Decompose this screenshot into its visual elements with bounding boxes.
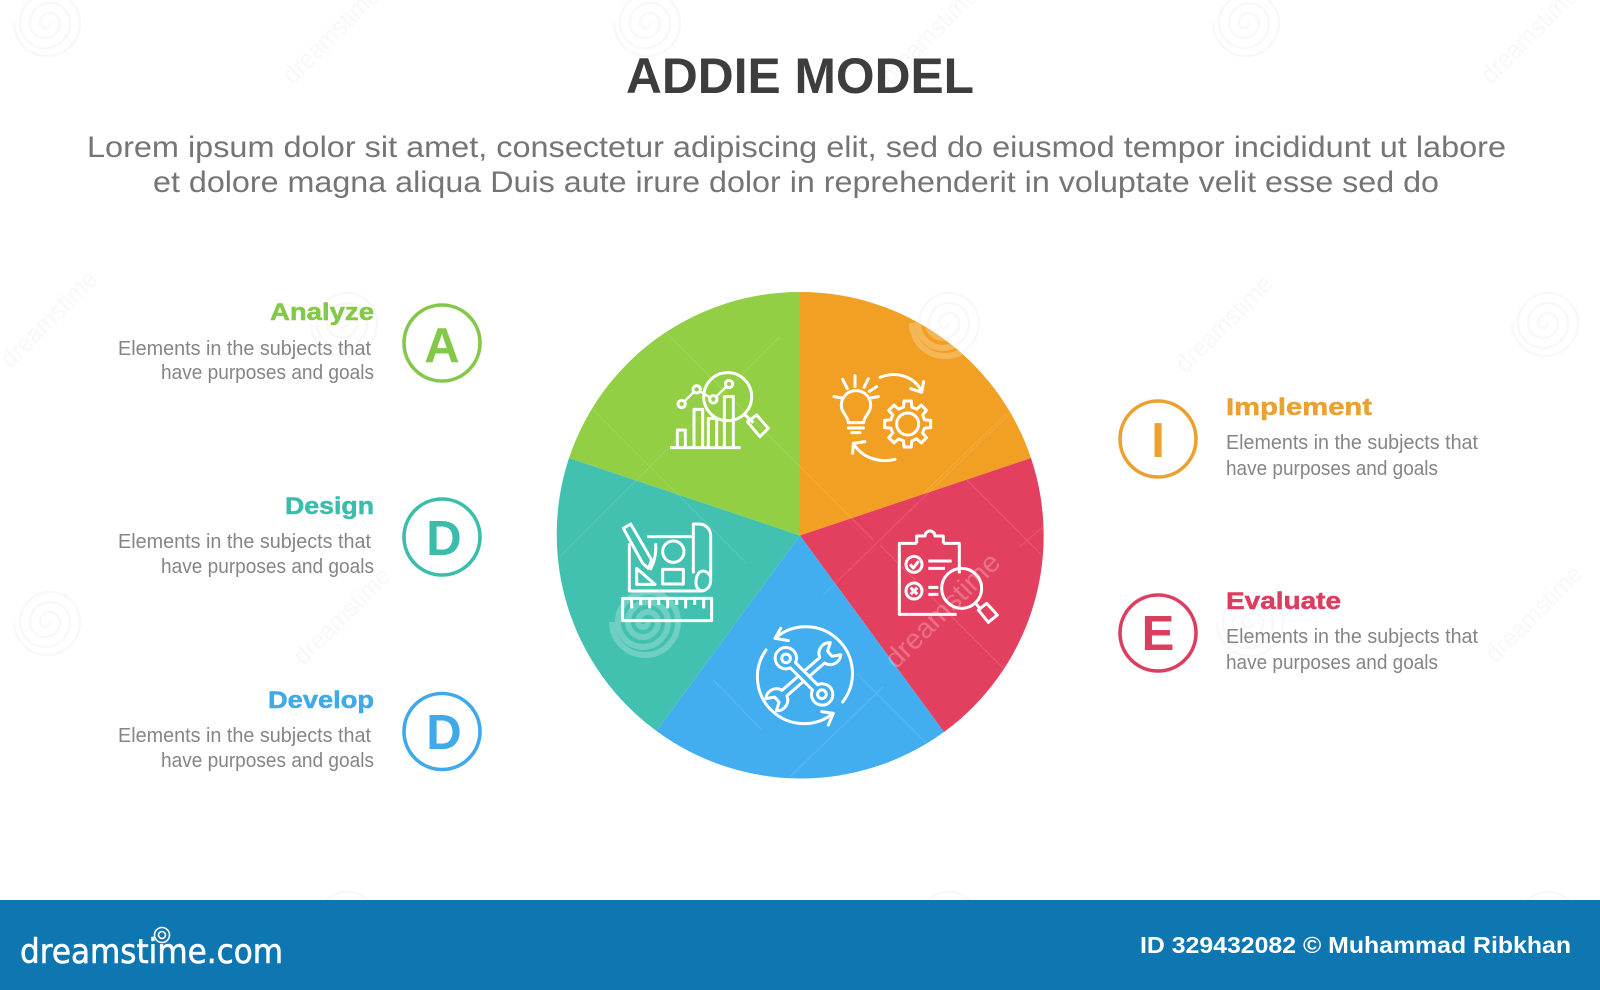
letter circle: A: A (424, 319, 460, 373)
description: analyze: Elements in the subjects that (118, 337, 371, 360)
icon: chart with magnifier (670, 373, 768, 448)
heading: evaluate: Evaluate (1226, 588, 1341, 615)
watermark pattern on background: dreamstime (1169, 269, 1278, 378)
description: implement: have purposes and goals (1226, 457, 1438, 480)
intro text block (87, 131, 1506, 199)
segment: analyze (569, 292, 800, 536)
segment: evaluate (800, 458, 1044, 732)
footer bar (0, 900, 1600, 990)
description: implement (1226, 431, 1478, 480)
description: design: Elements in the subjects that (118, 530, 371, 553)
segment: design (557, 458, 800, 731)
footer logo: dreamstime.com (20, 932, 283, 972)
intro text block: Lorem ipsum dolor sit amet, consectetur adipiscing elit, sed do eiusmod tempor incididunt ut labore (87, 131, 1506, 164)
watermark pattern on background: dreamstime (1479, 559, 1588, 668)
description: analyze (118, 337, 374, 384)
panel: implement (1120, 394, 1478, 480)
icon: clipboard with magnifier (899, 531, 997, 622)
letter circle: A (404, 305, 480, 381)
description: evaluate: Elements in the subjects that (1226, 625, 1478, 648)
description: design: have purposes and goals (161, 555, 374, 578)
icon: wrenches in cycle arrows (757, 627, 852, 725)
icon: blueprint and ruler (623, 524, 712, 621)
pie chart: dreamstime (878, 546, 1006, 674)
letter circle: D: D (426, 512, 462, 566)
description: evaluate (1226, 625, 1478, 674)
description: design (118, 530, 374, 578)
description: develop: have purposes and goals (161, 749, 374, 772)
heading: develop: Develop (268, 687, 374, 714)
panel: evaluate (1120, 588, 1478, 674)
letter circle: E: E (1142, 607, 1174, 661)
heading: design: Design (285, 493, 374, 520)
heading: implement: Implement (1226, 394, 1372, 421)
letter circle: I (1120, 401, 1196, 477)
description: analyze: have purposes and goals (161, 361, 374, 384)
title: ADDIE MODEL (626, 48, 974, 104)
letter circle: D: D (426, 706, 462, 760)
description: develop (118, 724, 374, 772)
segment: implement (800, 292, 1031, 536)
letter circle: I: I (1151, 414, 1165, 468)
watermark pattern on background: dreamstime (287, 561, 396, 670)
segment: develop (656, 536, 944, 778)
panel: develop (118, 687, 480, 772)
icon: bulb, gear and cycle arrows (834, 375, 931, 461)
description: develop: Elements in the subjects that (118, 724, 371, 747)
pie chart: dreamstime (571, 269, 680, 378)
description: implement: Elements in the subjects that (1226, 431, 1478, 454)
heading: analyze: Analyze (270, 299, 374, 326)
intro text block: et dolore magna aliqua Duis aute irure dolor in reprehenderit in voluptate velit esse sed do (153, 166, 1439, 199)
letter circle: D (404, 694, 480, 770)
description: evaluate: have purposes and goals (1226, 651, 1438, 674)
letter circle: E (1120, 595, 1196, 671)
pie chart (557, 269, 1044, 778)
panel: analyze (118, 299, 480, 384)
letter circle: D (404, 499, 480, 575)
panel: design (118, 493, 480, 578)
footer credit: ID 329432082 © Muhammad Ribkhan (1140, 932, 1571, 958)
